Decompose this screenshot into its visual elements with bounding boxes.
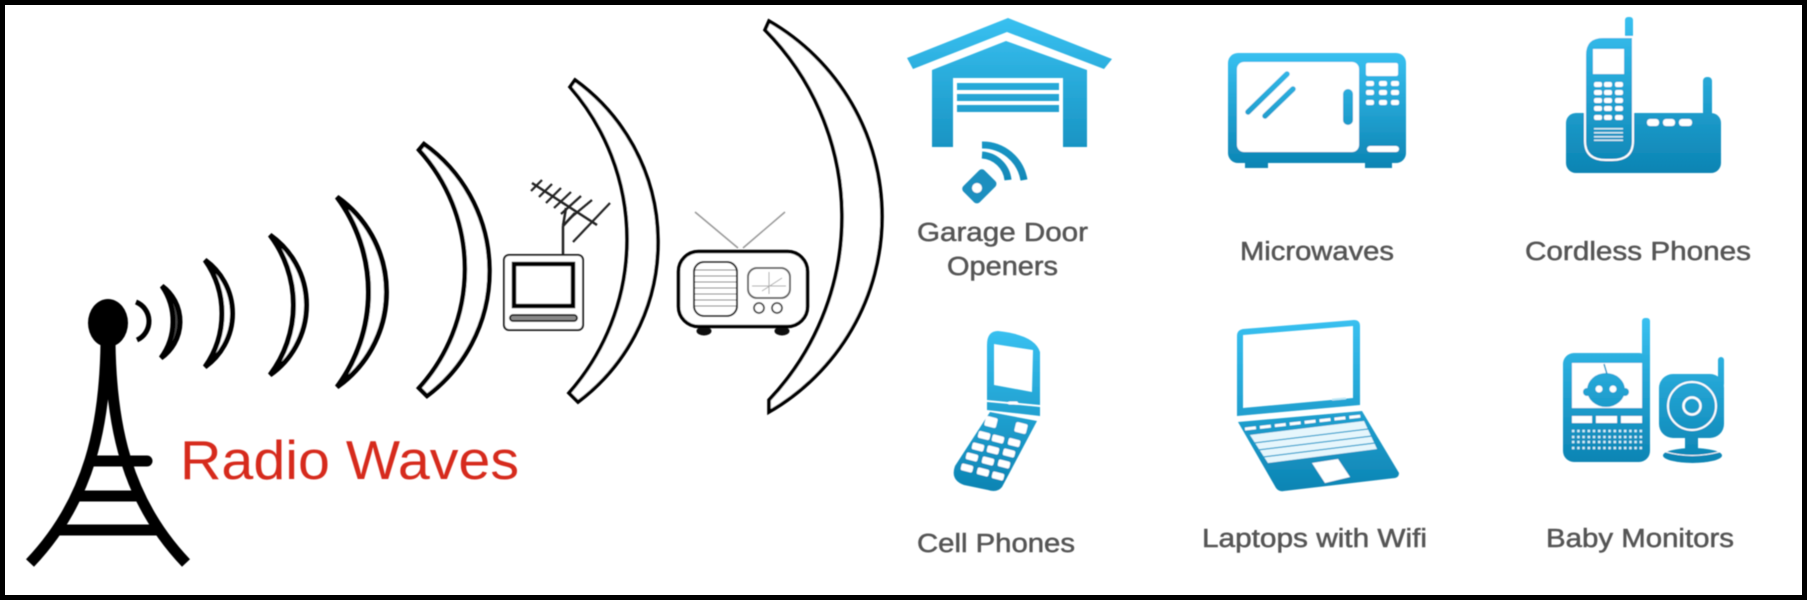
label: Baby Monitors: Baby Monitors: [1546, 525, 1734, 553]
label: Garage Door Openers: Garage Door: [917, 219, 1089, 247]
icon: cordless phone: [1566, 17, 1721, 173]
label: Cordless Phones: Cordless Phones: [1525, 238, 1751, 266]
device: microwave: [1228, 53, 1406, 266]
icon: microwave: [1228, 53, 1406, 168]
label: Garage Door Openers: [917, 219, 1089, 281]
device: cordless phone: [1525, 17, 1751, 266]
panel: devices grid: [907, 17, 1751, 558]
label: Garage Door Openers: Openers: [947, 253, 1058, 281]
icon: vintage radio: [678, 212, 808, 336]
device: cell phone: [917, 331, 1075, 558]
device: garage door opener: [907, 18, 1112, 281]
icon: baby monitor and camera: [1563, 318, 1724, 463]
panel: radio waves illustration: [30, 21, 882, 563]
label: Microwaves: Microwaves: [1240, 238, 1394, 266]
icon: radio tower: [30, 299, 186, 563]
device: baby monitor: [1546, 318, 1734, 553]
device: laptop: [1202, 320, 1427, 553]
label: Cell Phones: Cell Phones: [917, 530, 1075, 558]
icon: television with antenna: [504, 180, 610, 330]
heading: Radio Waves: Radio Waves: [180, 430, 519, 491]
radio wave arcs: [136, 21, 882, 412]
icon: laptop: [1237, 320, 1399, 491]
icon: garage: [907, 18, 1112, 205]
label: Laptops with Wifi: Laptops with Wifi: [1202, 525, 1427, 553]
icon: flip phone: [954, 331, 1040, 491]
